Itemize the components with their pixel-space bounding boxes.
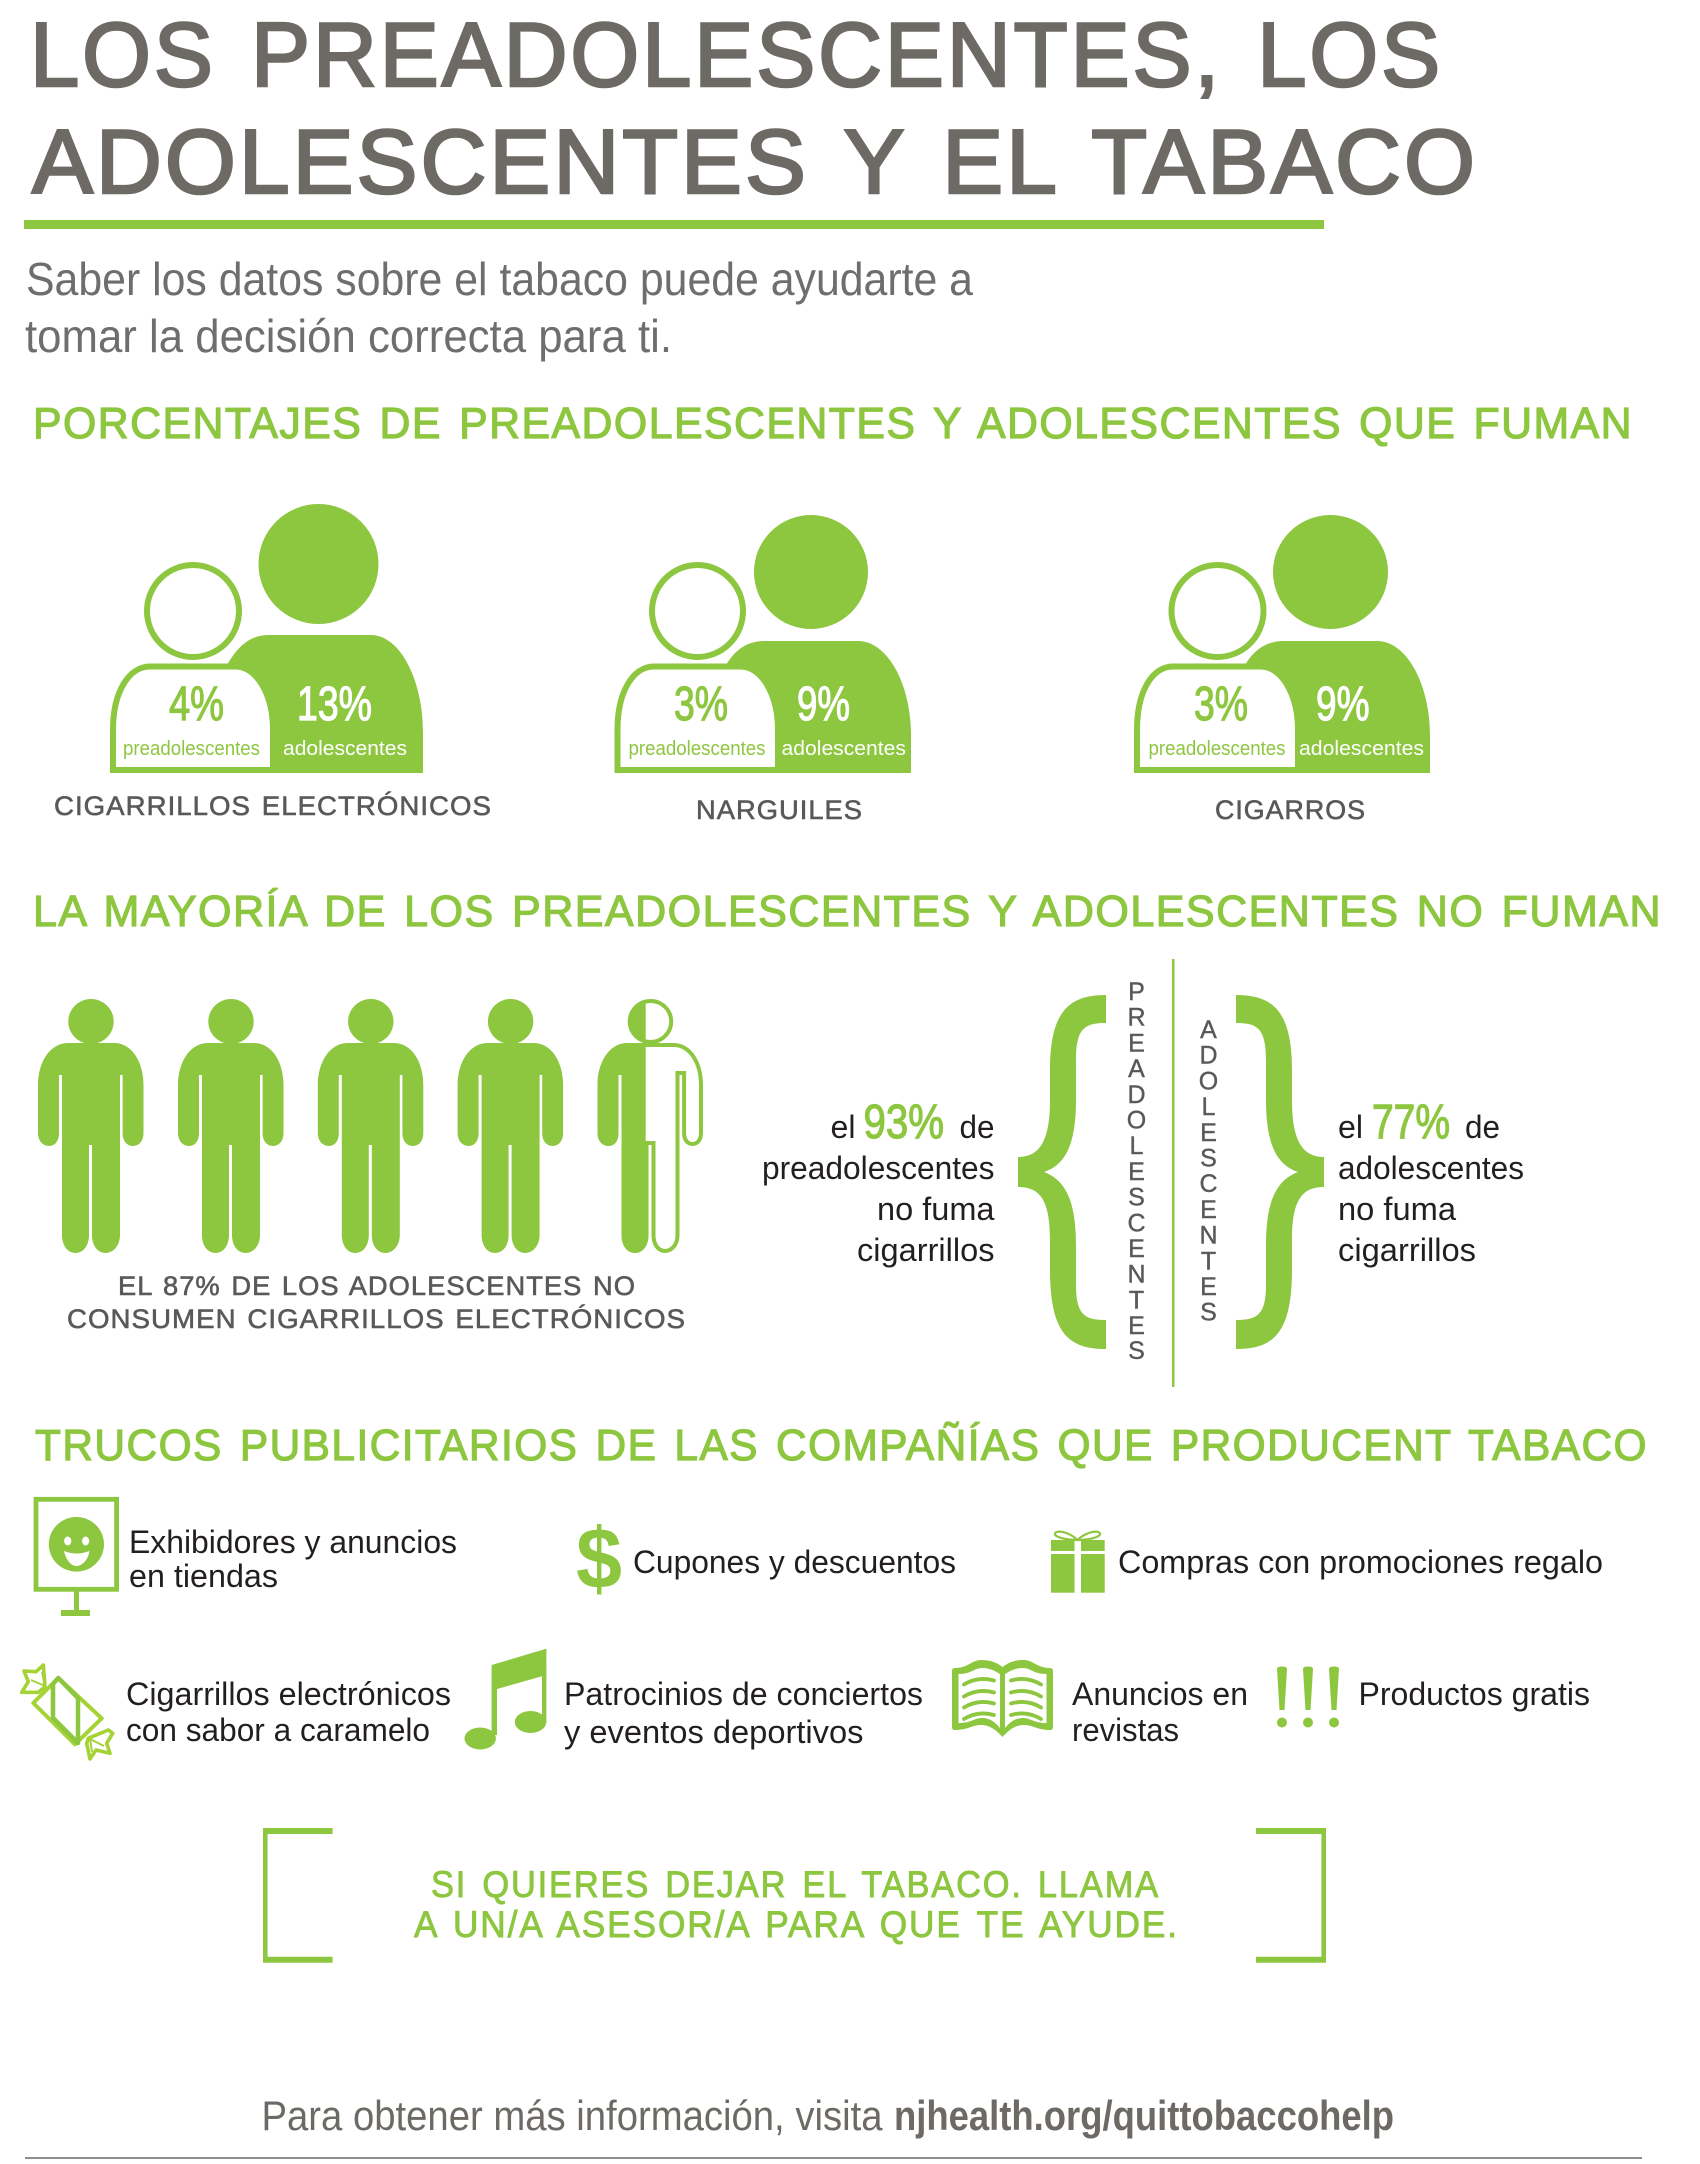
panel: narguiles — [617, 515, 911, 825]
text: preadolescentes 93%: de — [960, 1109, 994, 1145]
text: preadolescentes 93%: preadolescentes — [762, 1150, 994, 1186]
callout text: SI QUIERES DEJAR EL TABACO. LLAMA — [431, 1864, 1160, 1905]
icon: person 3 — [318, 999, 423, 1253]
text — [126, 1676, 451, 1748]
item: productos gratis — [1277, 1666, 1590, 1728]
item: compras con regalo — [1051, 1532, 1603, 1593]
title: LOS PREADOLESCENTES, LOS — [30, 5, 1443, 106]
icon: dollar sign: $ — [576, 1511, 622, 1607]
vertical label: adolescentes: D — [1199, 1042, 1218, 1070]
text: adolescentes 77% — [1338, 1096, 1524, 1268]
text — [564, 1676, 923, 1750]
text: adolescentes 77%: adolescentes — [1338, 1150, 1524, 1186]
vertical label: preadolescentes: L — [1130, 1132, 1144, 1160]
vertical label: adolescentes: S — [1200, 1298, 1217, 1326]
caption: CONSUMEN CIGARRILLOS ELECTRÓNICOS — [67, 1303, 686, 1334]
text: adolescentes 77%: cigarrillos — [1338, 1232, 1476, 1268]
text: Patrocinios de conciertos — [564, 1676, 923, 1712]
footer text: njhealth.org/quittobaccohelp — [894, 2092, 1394, 2139]
item: exhibidores — [36, 1499, 457, 1616]
vertical label: preadolescentes: E — [1128, 1312, 1145, 1340]
stat: preadolescentes 3% — [1148, 678, 1286, 760]
icon: person 4 — [458, 999, 563, 1253]
text: adolescentes 77%: de — [1465, 1109, 1500, 1145]
title underline — [24, 220, 1324, 229]
vertical label: adolescentes: O — [1199, 1067, 1218, 1095]
right bracket — [1256, 1828, 1326, 1963]
text: Exhibidores y anuncios — [129, 1524, 457, 1560]
text: Anuncios en — [1072, 1676, 1248, 1712]
text: revistas — [1072, 1712, 1179, 1748]
vertical label: preadolescentes: P — [1128, 978, 1145, 1006]
intro text: Saber los datos sobre el tabaco puede ayudarte a — [26, 253, 973, 305]
label: CIGARRILLOS ELECTRÓNICOS — [54, 790, 492, 821]
text: preadolescentes 93%: no fuma — [877, 1191, 995, 1227]
text: preadolescentes 93%: cigarrillos — [857, 1232, 994, 1268]
label: NARGUILES — [696, 795, 863, 825]
vertical label: adolescentes: E — [1200, 1196, 1217, 1224]
vertical label: preadolescentes: O — [1127, 1106, 1146, 1134]
icon: candy — [22, 1665, 113, 1759]
item: cigarrillos con sabor — [22, 1665, 451, 1759]
callout text — [414, 1864, 1179, 1945]
text: adolescentes 77%: no fuma — [1338, 1191, 1456, 1227]
item: cupones — [576, 1511, 956, 1607]
icon: preteen figure — [1137, 565, 1298, 770]
left bracket — [263, 1828, 333, 1963]
stat: adolescentes 9%: 9% — [797, 678, 850, 731]
icon: adolescent figure — [617, 515, 911, 773]
text: adolescentes 77%: 77% — [1372, 1096, 1450, 1149]
icon: right brace — [1236, 995, 1324, 1349]
item: patrocinios — [464, 1649, 923, 1750]
stat: adolescentes 13%: 13% — [297, 678, 372, 731]
vertical label: adolescentes: S — [1200, 1144, 1217, 1172]
panel: cigarrillos electrónicos — [54, 504, 492, 821]
stat: preadolescentes 4%: 4% — [169, 678, 224, 731]
text: y eventos deportivos — [564, 1714, 864, 1750]
text — [129, 1524, 457, 1594]
stat: adolescentes 13%: adolescentes — [283, 738, 407, 760]
stat: preadolescentes 4% — [123, 678, 260, 760]
vertical label: preadolescentes: A — [1128, 1055, 1145, 1083]
intro text: tomar la decisión correcta para ti. — [25, 310, 672, 362]
callout: quit message — [263, 1828, 1326, 1963]
icon: preteen figure — [618, 565, 778, 770]
footer text: Para obtener más información, visita — [262, 2092, 883, 2139]
label: CIGARROS — [1215, 795, 1366, 825]
item: revistas — [952, 1660, 1248, 1748]
stat: adolescentes 9%: adolescentes — [1299, 738, 1424, 760]
vertical label: preadolescentes: E — [1128, 1158, 1145, 1186]
text: Cigarrillos electrónicos — [126, 1676, 451, 1712]
text: en tiendas — [129, 1558, 278, 1594]
vertical label: adolescentes: E — [1200, 1273, 1217, 1301]
vertical label: preadolescentes: S — [1128, 1184, 1145, 1212]
icon: display with smiling face — [36, 1499, 117, 1616]
stat: adolescentes 9% — [1299, 678, 1424, 760]
title — [30, 5, 1478, 213]
icon: person 2 — [178, 999, 284, 1253]
stat: preadolescentes 3%: preadolescentes — [628, 738, 766, 760]
icon: adolescent figure — [112, 504, 423, 773]
intro text — [25, 253, 973, 362]
text: preadolescentes 93% — [762, 1096, 995, 1268]
stat: adolescentes 9%: adolescentes — [782, 738, 906, 760]
icon: gift — [1051, 1532, 1105, 1593]
divider — [1172, 959, 1174, 1387]
stat: preadolescentes 3%: 3% — [674, 678, 728, 731]
stat: preadolescentes 3%: 3% — [1194, 678, 1248, 731]
vertical label: preadolescentes: C — [1127, 1209, 1146, 1237]
text: adolescentes 77%: el — [1338, 1109, 1363, 1145]
text — [1072, 1676, 1248, 1748]
heading: la mayoría: LA MAYORÍA DE LOS PREADOLESCENTES Y ADOLESCENTES NO FUMAN — [33, 887, 1662, 936]
stat: adolescentes 9%: 9% — [1316, 678, 1370, 731]
vertical label: adolescentes: C — [1199, 1170, 1218, 1198]
vertical label: adolescentes: E — [1200, 1119, 1217, 1147]
stat: adolescentes 9% — [782, 678, 906, 760]
vertical label: preadolescentes: E — [1128, 1029, 1145, 1057]
text: Productos gratis — [1358, 1676, 1590, 1712]
icon: music notes — [464, 1649, 546, 1750]
icon: adolescent figure — [1136, 515, 1430, 773]
pictogram: 87% of teens — [38, 999, 703, 1334]
text: Cupones y descuentos — [633, 1544, 956, 1580]
title: ADOLESCENTES Y EL TABACO — [32, 112, 1478, 213]
icon: exclamation marks — [1277, 1666, 1339, 1728]
text: preadolescentes 93%: 93% — [864, 1096, 944, 1149]
heading: porcentajes: PORCENTAJES DE PREADOLESCENTES Y ADOLESCENTES QUE FUMAN — [33, 399, 1633, 448]
stat: preadolescentes 3% — [628, 678, 766, 760]
vertical label: preadolescentes: T — [1129, 1286, 1144, 1314]
icon: person 1 — [38, 999, 144, 1253]
panel: cigarros — [1136, 515, 1430, 825]
caption — [67, 1271, 686, 1334]
vertical label: adolescentes: L — [1202, 1093, 1216, 1121]
vertical label: preadolescentes: S — [1128, 1337, 1145, 1365]
vertical label: adolescentes: N — [1199, 1222, 1218, 1250]
vertical label: adolescentes: T — [1201, 1247, 1216, 1275]
icon: person 5 partially filled — [598, 999, 703, 1253]
vertical label: preadolescentes: D — [1127, 1081, 1146, 1109]
stat: preadolescentes 3%: preadolescentes — [1148, 738, 1286, 760]
vertical label: preadolescentes: N — [1127, 1261, 1146, 1289]
text: preadolescentes 93%: el — [830, 1109, 856, 1145]
stat: preadolescentes 4%: preadolescentes — [123, 738, 260, 760]
footer text — [262, 2092, 1394, 2139]
caption: EL 87% DE LOS ADOLESCENTES NO — [118, 1271, 636, 1301]
icon: preteen figure — [113, 565, 273, 770]
vertical label: adolescentes: A — [1200, 1016, 1217, 1044]
vertical label: preadolescentes: E — [1128, 1235, 1145, 1263]
vertical label: preadolescentes: R — [1127, 1004, 1146, 1032]
callout text: A UN/A ASESOR/A PARA QUE TE AYUDE. — [414, 1904, 1179, 1945]
text: con sabor a caramelo — [126, 1712, 430, 1748]
icon: left brace — [1018, 995, 1106, 1349]
stat: adolescentes 13% — [283, 678, 407, 760]
heading: trucos publicitarios: TRUCOS PUBLICITARIOS DE LAS COMPAÑÍAS QUE PRODUCENT TABACO — [35, 1420, 1648, 1470]
icon: open book — [952, 1660, 1053, 1737]
text: Compras con promociones regalo — [1118, 1544, 1603, 1580]
